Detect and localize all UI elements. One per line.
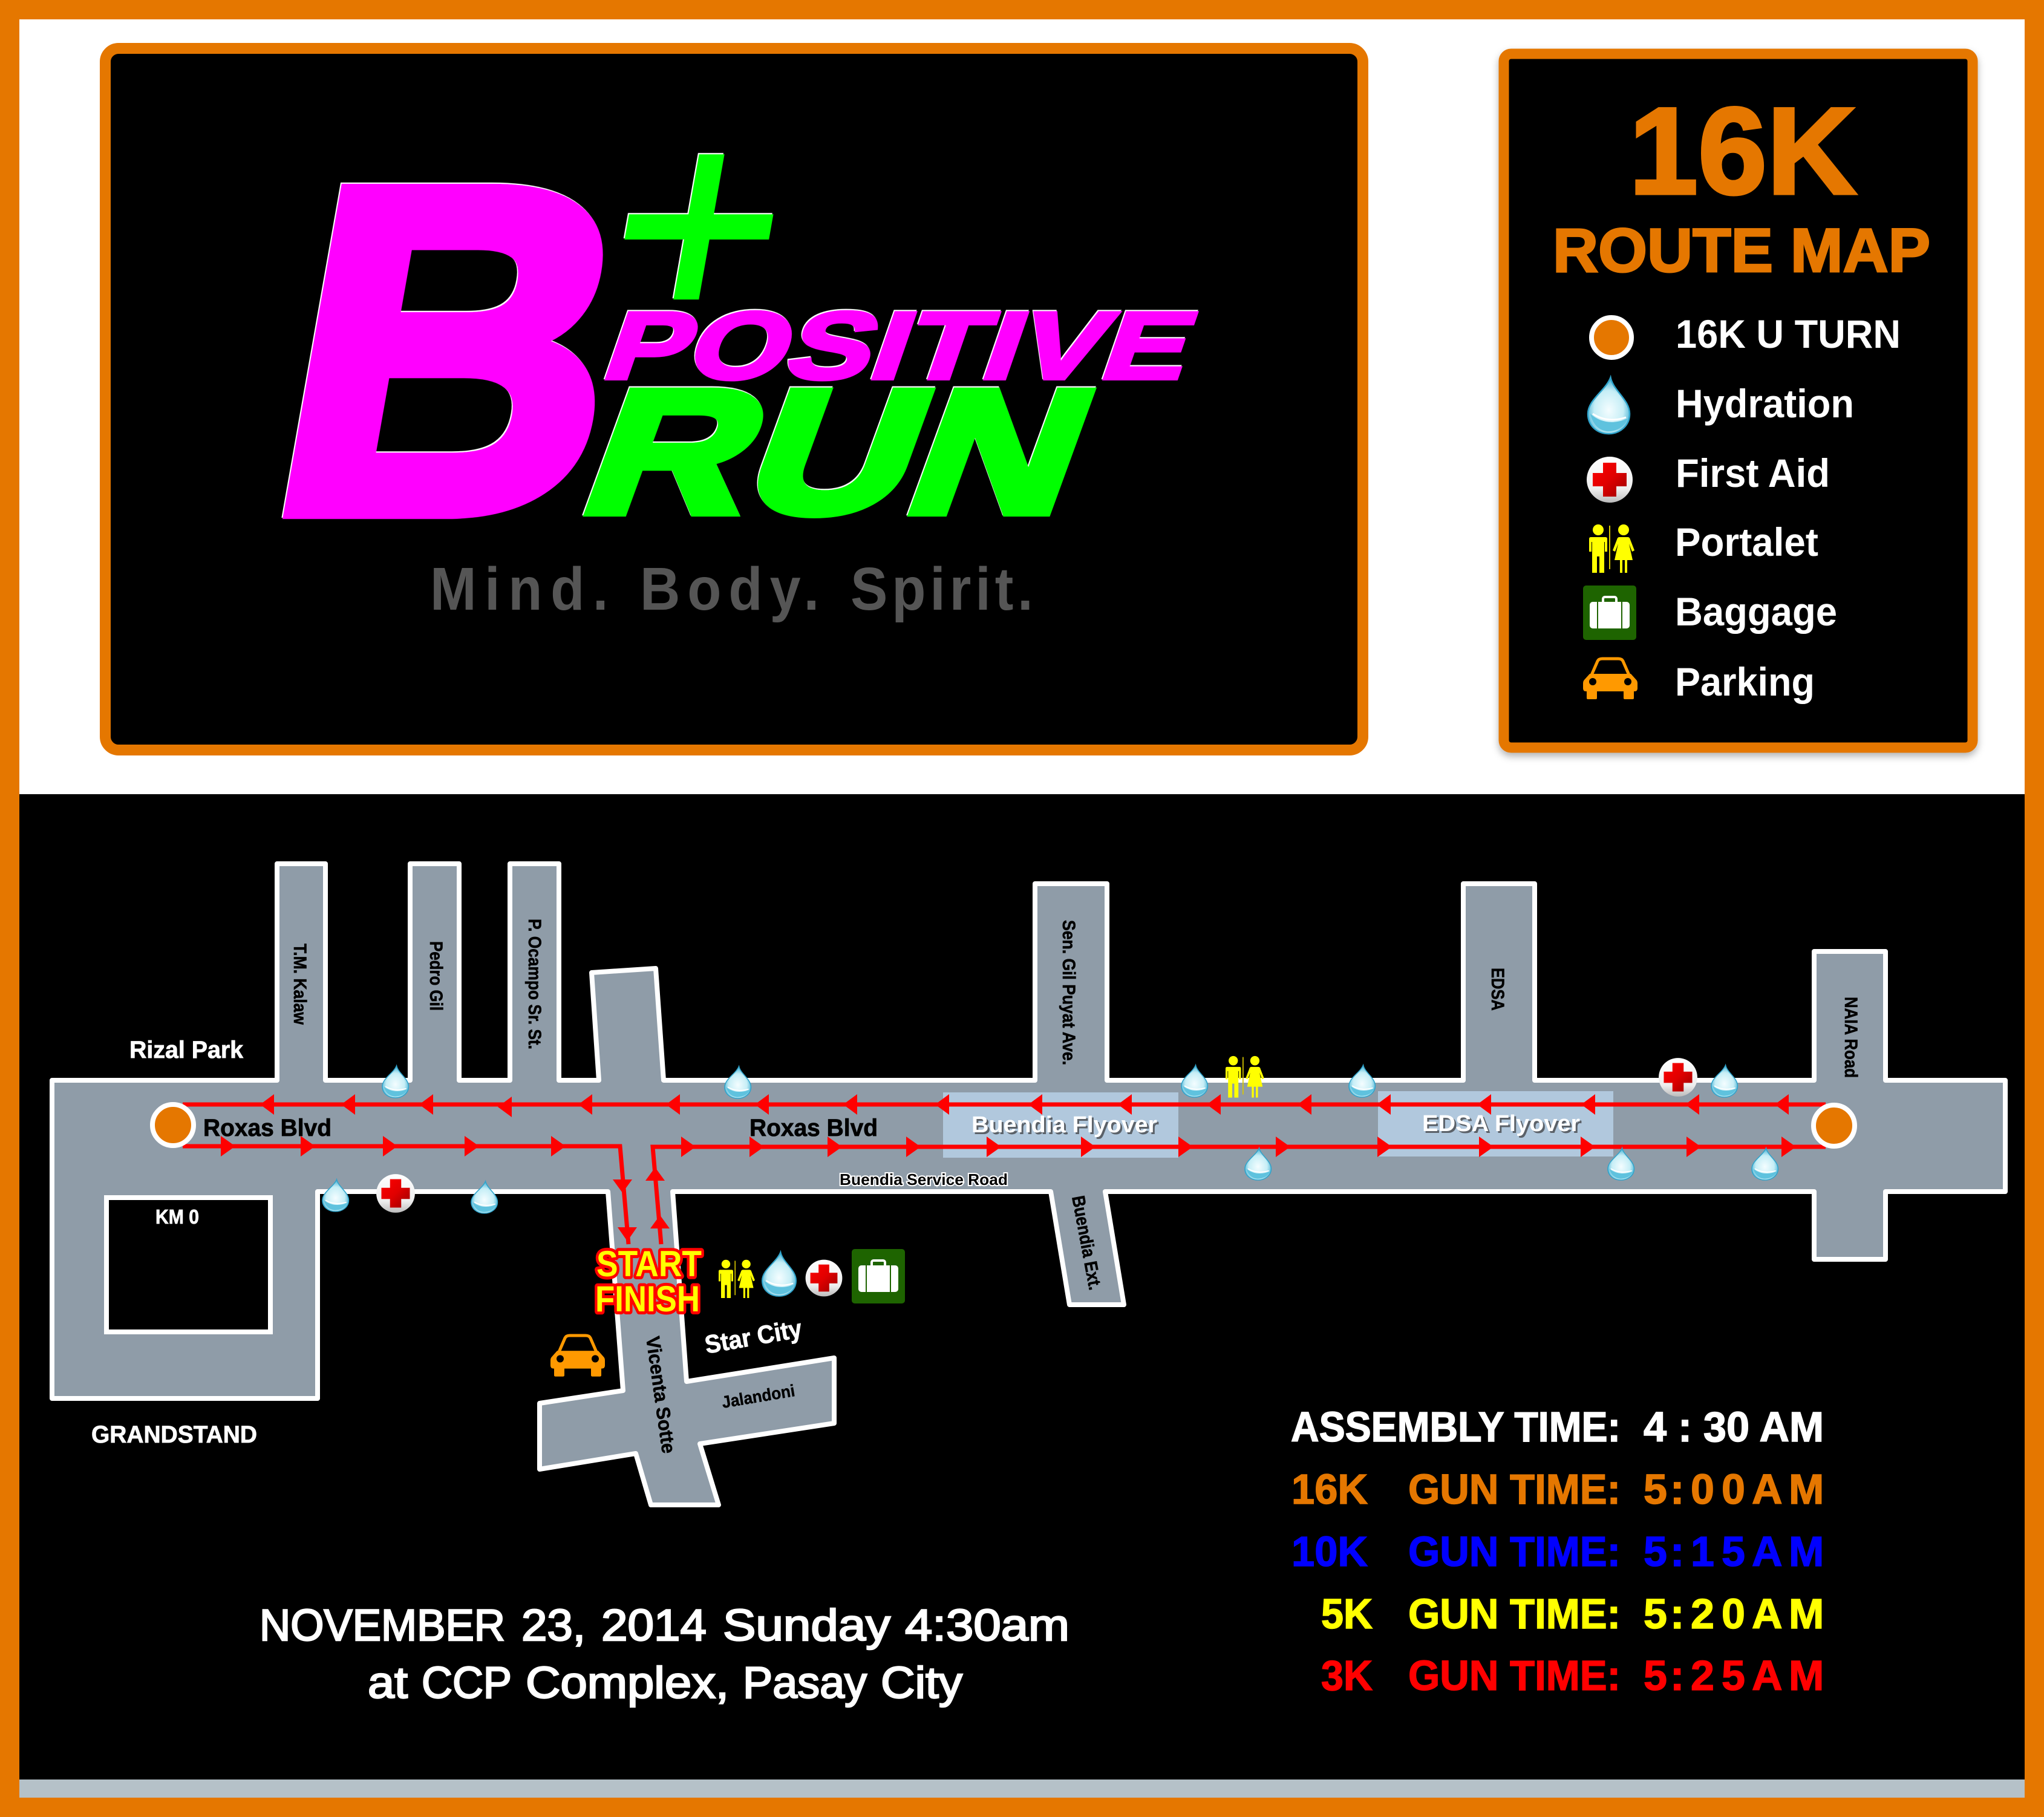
route arrows: Vicenta Sotte [613, 1167, 670, 1241]
label: Vicenta Sotte: Vicenta Sotte [642, 1335, 680, 1455]
label: hydration: Hydration [1676, 381, 1854, 426]
label: T.M. Kalaw: T.M. Kalaw [290, 944, 310, 1025]
EDSA flyover band [1378, 1091, 1613, 1156]
marker: east u turn [1814, 1105, 1855, 1146]
label: P. Ocampo Sr. St.: P. Ocampo Sr. St. [524, 919, 544, 1049]
5K gun time: 5K [1321, 1590, 1373, 1637]
10K gun time [1291, 1528, 1824, 1575]
white upper background [19, 19, 2025, 794]
start area parking [550, 1336, 605, 1377]
assembly time: ASSEMBLY TIME: [1291, 1403, 1621, 1450]
label: NAIA Road: NAIA Road [1841, 997, 1861, 1078]
label: Grandstand: GRANDSTAND [91, 1421, 257, 1448]
3K gun time: 5:25AM [1644, 1652, 1824, 1699]
16K gun time: 5:00AM [1644, 1466, 1824, 1513]
icon: portalet [1589, 524, 1634, 573]
10K gun time: 5:15AM [1644, 1528, 1824, 1575]
grey footer strip [19, 1779, 2025, 1798]
event date: 23, [521, 1601, 586, 1650]
5K gun time: GUN TIME: [1408, 1590, 1621, 1637]
heading: 16K: 16K [1629, 82, 1856, 220]
16K gun time: GUN TIME: [1408, 1466, 1621, 1513]
tagline: Spirit. [851, 555, 1033, 623]
KM 0 block [106, 1198, 270, 1332]
panel: route map [52, 864, 2005, 1505]
5K gun time: 5:20AM [1644, 1590, 1824, 1637]
panel: logo [105, 48, 1363, 750]
assembly time: 4 : 30 AM [1644, 1403, 1824, 1450]
black map background [19, 794, 2025, 1779]
finish text: FINISH [595, 1279, 700, 1319]
route arrows: eastbound [221, 1136, 1796, 1157]
label: Jalandoni: Jalandoni [720, 1381, 796, 1412]
label: Roxas Blvd east: Roxas Blvd [749, 1115, 878, 1141]
marker: west u turn [152, 1104, 194, 1146]
tagline [430, 555, 1033, 623]
route arrows: westbound [260, 1094, 1789, 1117]
start area hydration [762, 1252, 796, 1296]
start area first aid [806, 1260, 842, 1296]
hydration stations on route [322, 1065, 1778, 1213]
Buendia flyover band [943, 1092, 1178, 1158]
first aid stations on route [376, 1058, 1697, 1213]
label: EDSA: EDSA [1487, 968, 1507, 1011]
road network [52, 864, 2005, 1505]
logo plus sign: + [587, 63, 812, 383]
start and finish label [595, 1244, 702, 1319]
event date [260, 1601, 1069, 1650]
logo word RUN: RUN [561, 354, 1118, 550]
panel: gun times [1291, 1403, 1824, 1699]
logo word POSITIVE: POSITIVE [592, 293, 1210, 399]
event date: NOVEMBER [260, 1601, 505, 1650]
icon: hydration [1588, 377, 1630, 434]
logo letter B: B [244, 92, 664, 608]
3K gun time: GUN TIME: [1408, 1652, 1621, 1699]
start text: START [596, 1244, 702, 1284]
label: Buendia Flyover: Buendia Flyover [971, 1112, 1157, 1138]
start area portalet [719, 1260, 755, 1298]
5K gun time [1321, 1590, 1824, 1637]
portalet on route [1226, 1056, 1264, 1098]
3K gun time: 3K [1321, 1652, 1373, 1699]
tagline: Mind. [430, 555, 608, 623]
event venue: Pasay [743, 1659, 867, 1708]
10K gun time: 10K [1291, 1528, 1368, 1575]
16K gun time: 16K [1291, 1466, 1368, 1513]
label: Rizal Park: Rizal Park [129, 1037, 244, 1063]
label: EDSA Flyover: EDSA Flyover [1422, 1111, 1580, 1137]
event venue: CCP [422, 1659, 512, 1708]
start area baggage [852, 1249, 905, 1303]
event venue: City [881, 1659, 963, 1708]
heading: route map: ROUTE MAP [1553, 216, 1930, 285]
label: baggage: Baggage [1675, 589, 1837, 634]
16K gun time [1291, 1466, 1824, 1513]
event date: 4:30am [905, 1601, 1069, 1650]
icon: first aid [1587, 457, 1633, 503]
event date: Sunday [723, 1601, 891, 1650]
label: Star City: Star City [702, 1314, 805, 1359]
icon: u turn [1592, 318, 1631, 357]
icon: parking [1583, 659, 1637, 699]
label: Buendia Service Road: Buendia Service Road [840, 1170, 1008, 1189]
label: portalet: Portalet [1675, 520, 1818, 564]
event venue: Complex, [526, 1659, 729, 1708]
event venue: at [368, 1659, 408, 1708]
assembly time [1291, 1403, 1824, 1450]
label: Buendia Ext.: Buendia Ext. [1068, 1194, 1105, 1292]
tagline: Body. [640, 555, 819, 623]
3K gun time [1321, 1652, 1824, 1699]
event venue [368, 1659, 963, 1708]
label: KM 0: KM 0 [155, 1205, 199, 1228]
panel: legend [1504, 54, 1973, 748]
label: first aid: First Aid [1676, 451, 1830, 495]
10K gun time: GUN TIME: [1408, 1528, 1621, 1575]
route: outbound and return lines [183, 1104, 1826, 1244]
label: Pedro Gil: Pedro Gil [426, 941, 446, 1011]
label: parking: Parking [1675, 659, 1815, 704]
label: Roxas Blvd west: Roxas Blvd [203, 1115, 331, 1141]
label: u turn: 16K U TURN [1676, 312, 1901, 356]
label: Sen. Gil Puyat Ave.: Sen. Gil Puyat Ave. [1059, 920, 1079, 1065]
icon: baggage [1583, 586, 1636, 640]
event date: 2014 [601, 1601, 707, 1650]
